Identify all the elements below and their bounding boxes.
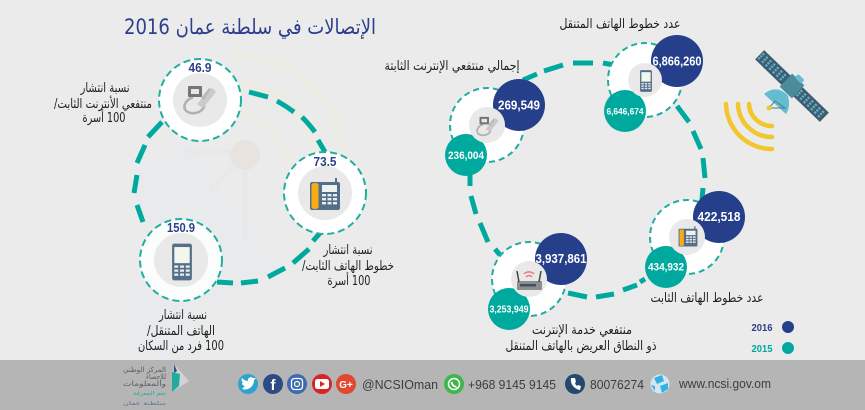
logo: والمعلومات: [123, 380, 166, 388]
value: 2016 mobile lines: 6,866,260: [652, 54, 702, 68]
value: 46.9: 46.9: [188, 60, 212, 75]
value: 2015 mobile lines: 6,646,674: [606, 106, 644, 118]
social: google plus: G+: [339, 380, 353, 391]
label: mobile penetration: [138, 308, 224, 354]
social handle: @NCSIOman: [362, 377, 438, 392]
icon: satellite: [726, 45, 833, 149]
label: fixed line penetration: خطوط الهاتف الثابت/: [302, 259, 394, 274]
icon: ethernet cable: [184, 86, 216, 113]
watermark: satellite dish: [130, 55, 346, 360]
value: 73.5: 73.5: [314, 154, 336, 169]
logo: نعم المعرفة: [133, 391, 167, 397]
value: 2016 fixed internet: 269,549: [498, 98, 540, 112]
icon: landline phone: [679, 226, 697, 246]
label: mobile penetration: 100 فرد من السكان: [138, 339, 224, 354]
left ring connector: [134, 92, 325, 283]
panel: fixed internet penetration: [159, 59, 241, 141]
label: mobile penetration: نسبة انتشار: [158, 308, 207, 323]
label: fixed line penetration: 100 أسرة: [328, 272, 370, 289]
icon: globe: [650, 374, 670, 394]
label: mobile broadband users: ذو النطاق العريض بالهاتف المتنقل: [506, 339, 657, 354]
panel: mobile broadband users: [488, 233, 587, 330]
icon: ethernet cable: [477, 117, 499, 135]
label: fixed internet penetration: 100 أسرة: [82, 109, 126, 126]
logo: سلطنة عمان: [123, 401, 167, 407]
social: instagram: [287, 374, 307, 394]
label: fixed internet penetration: منتفعي الأنترنت الثابت/: [54, 95, 152, 112]
social: facebook: f: [270, 377, 276, 394]
panel: fixed internet users: [445, 79, 545, 176]
label: mobile penetration: الهاتف المتنقل/: [147, 324, 215, 339]
icon: phone: [565, 374, 585, 394]
whatsapp number: +968 9145 9145: [468, 377, 556, 392]
logo: المركز الوطني: [123, 366, 166, 374]
panel: fixed line penetration: [284, 152, 366, 234]
label: fixed lines: عدد خطوط الهاتف الثابت: [650, 291, 764, 306]
social: youtube: [312, 374, 332, 394]
label: mobile broadband users: منتفعي خدمة الإنترنت: [532, 323, 632, 338]
website: www.ncsi.gov.om: [678, 376, 771, 391]
icon: mobile phone: [172, 244, 192, 280]
right ring connector: [470, 63, 705, 297]
label: fixed line penetration: [302, 243, 394, 289]
phone number: 80076274: [590, 377, 644, 392]
value: 2016 fixed lines: 422,518: [698, 209, 740, 224]
label: fixed internet penetration: [54, 81, 152, 126]
social: facebook: [263, 374, 283, 394]
social: twitter: [238, 374, 258, 394]
value: 2016 mobile broadband: 3,937,861: [536, 252, 587, 266]
value: 150.9: 150.9: [167, 220, 195, 235]
legend: [752, 321, 794, 355]
value: 2015 fixed lines: 434,932: [648, 262, 684, 274]
logo: [123, 364, 189, 407]
panel: mobile penetration: [140, 219, 222, 301]
label: mobile broadband users: [506, 323, 657, 354]
icon: landline phone: [310, 178, 340, 210]
panel: fixed lines: [645, 191, 745, 288]
legend: 2015: [752, 344, 773, 355]
value: 2015 fixed internet: 236,004: [448, 150, 485, 162]
label: mobile lines: عدد خطوط الهاتف المتنقل: [560, 17, 680, 32]
label: fixed internet users: إجمالي منتفعي الإنترنت الثابتة: [384, 59, 520, 74]
value: 2015 mobile broadband: 3,253,949: [490, 304, 529, 316]
icon: mobile phone: [640, 70, 652, 92]
label: fixed internet penetration: نسبة انتشار: [80, 81, 130, 96]
icon: whatsapp: [444, 374, 464, 394]
icon: wifi router: [517, 271, 542, 290]
title: الإتصالات في سلطنة عمان 2016: [124, 15, 376, 39]
panel: mobile lines: [604, 35, 703, 132]
logo: للإحصاء: [146, 373, 166, 381]
social: google plus: [336, 374, 356, 394]
label: fixed line penetration: نسبة انتشار: [323, 243, 372, 258]
legend: 2016: [752, 323, 773, 334]
footer bar: [0, 360, 865, 410]
